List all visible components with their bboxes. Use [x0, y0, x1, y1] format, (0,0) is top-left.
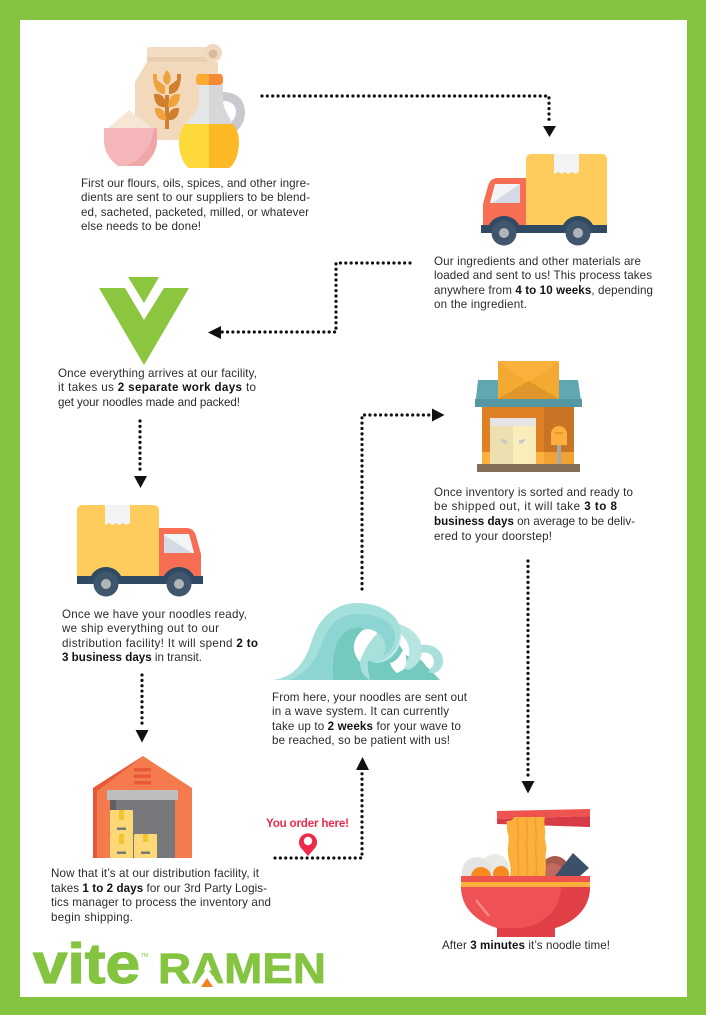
text: distribution facility: takes 1 to 2 days for our 3rd Party Logis- [51, 882, 267, 895]
arrow: order to wave [275, 757, 369, 858]
text: wave system [272, 691, 468, 747]
text: facility production [58, 367, 257, 409]
text: transit: 3 business days in transit. [62, 651, 202, 664]
text: shipping out: ered to your doorstep! [434, 530, 552, 543]
arrow: suppliers to truck [262, 96, 556, 137]
logo: Vite Ramen: RAMEN [158, 945, 326, 993]
text: shipping out: business days on average to be deliv- [434, 515, 635, 528]
text: transit: we ship everything out to our [61, 622, 219, 635]
text: transit [61, 608, 258, 664]
callout: you order here: You order here! [266, 817, 349, 830]
text: materials loaded: loaded and sent to us! This process takes [434, 269, 652, 282]
text: materials loaded: anywhere from 4 to 10 weeks, depending [434, 284, 653, 297]
arrow: facility to transit truck [134, 421, 147, 488]
text: suppliers: ed, sacheted, packeted, milled, or whatever [81, 206, 309, 219]
text: shipping out [434, 486, 635, 543]
icon: Vite V logo [99, 277, 189, 365]
text: distribution facility [51, 867, 271, 924]
text: facility production: get your noodles made and packed! [58, 396, 240, 409]
text: materials loaded: Our ingredients and other materials are [434, 255, 641, 268]
arrow: wave to post office [362, 408, 444, 589]
icon: flour, wheat bag, oil jar and bowl [104, 44, 245, 168]
arrow: truck to facility [208, 263, 410, 339]
text: shipping out: be shipped out, it will take 3 to 8 [434, 500, 618, 513]
logo: Vite Ramen [33, 932, 326, 996]
text: suppliers: First our flours, oils, spices, and other ingre- [81, 177, 310, 190]
text: wave system: in a wave system. It can currently [272, 705, 449, 718]
callout: you order here [266, 817, 349, 856]
icon: delivery truck outbound [77, 505, 203, 596]
text: noodle time: After 3 minutes it’s noodle time! [442, 939, 610, 952]
icon: delivery truck inbound [481, 154, 607, 246]
text: facility production: it takes us 2 separate work days to [58, 381, 256, 394]
logo: Vite Ramen: TM [141, 953, 148, 959]
text: facility production: Once everything arrives at our facility, [58, 367, 257, 380]
logo: Vite Ramen: vite [33, 932, 140, 996]
text: suppliers: else needs to be done! [81, 220, 201, 233]
text: transit: Once we have your noodles ready, [62, 608, 247, 621]
arrow: post office to ramen bowl [522, 561, 534, 794]
icon: post office shop [475, 361, 582, 472]
arrow: transit to warehouse [136, 675, 148, 742]
text: wave system: From here, your noodles are sent out [272, 691, 468, 704]
text: wave system: be reached, so be patient with us! [272, 734, 450, 747]
icon: ramen bowl [461, 809, 590, 937]
icon: ocean wave [273, 603, 443, 680]
text: wave system: take up to 2 weeks for your wave to [272, 720, 461, 733]
text: materials loaded: on the ingredient. [434, 298, 527, 311]
icon: warehouse with boxes [93, 756, 192, 858]
text: distribution facility: begin shipping. [51, 911, 133, 924]
text: suppliers: dients are sent to our suppliers to be blend- [81, 191, 310, 204]
text: distribution facility: Now that it’s at our distribution facility, it [51, 867, 260, 880]
text: distribution facility: tics manager to process the inventory and [51, 896, 271, 909]
text: materials loaded [434, 255, 653, 311]
text: shipping out: Once inventory is sorted and ready to [434, 486, 633, 499]
text: suppliers [81, 177, 310, 233]
text: transit: distribution facility! It will spend 2 to [62, 637, 258, 650]
